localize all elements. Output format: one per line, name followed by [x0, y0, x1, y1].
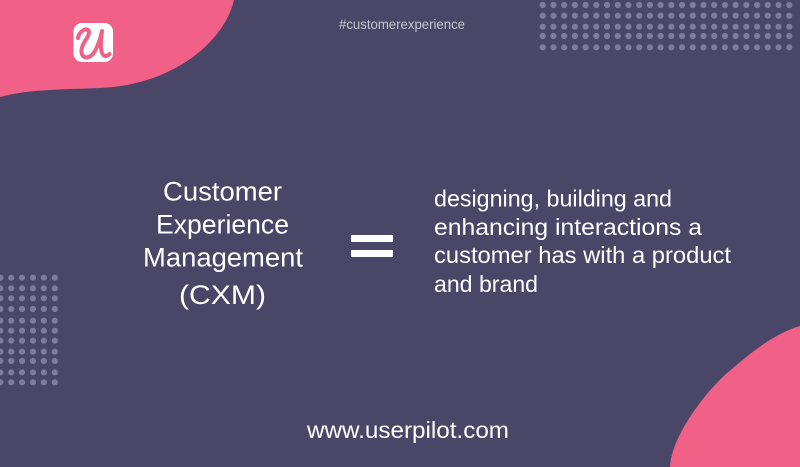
definition text: and brand [434, 271, 538, 297]
equals sign [351, 235, 393, 257]
term: customer experience management: Experience [156, 210, 289, 240]
definition text: designing, building and [434, 186, 672, 212]
website url: www.userpilot.com [306, 417, 509, 443]
definition text: enhancing interactions a [434, 214, 703, 240]
term: customer experience management: Management [143, 243, 304, 273]
dot grid: left [0, 278, 56, 382]
hashtag: #customerexperience [339, 17, 465, 32]
term: customer experience management [143, 176, 304, 310]
pink blob: bottom right [670, 326, 800, 467]
term: customer experience management: Customer [163, 176, 282, 206]
definition text [434, 186, 731, 297]
term: customer experience management: (CXM) [179, 280, 266, 310]
icon: userpilot logo [74, 23, 113, 62]
definition text: customer has with a product [434, 242, 731, 268]
dot grid: top right [543, 5, 790, 47]
pink blob: top left [0, 0, 234, 97]
